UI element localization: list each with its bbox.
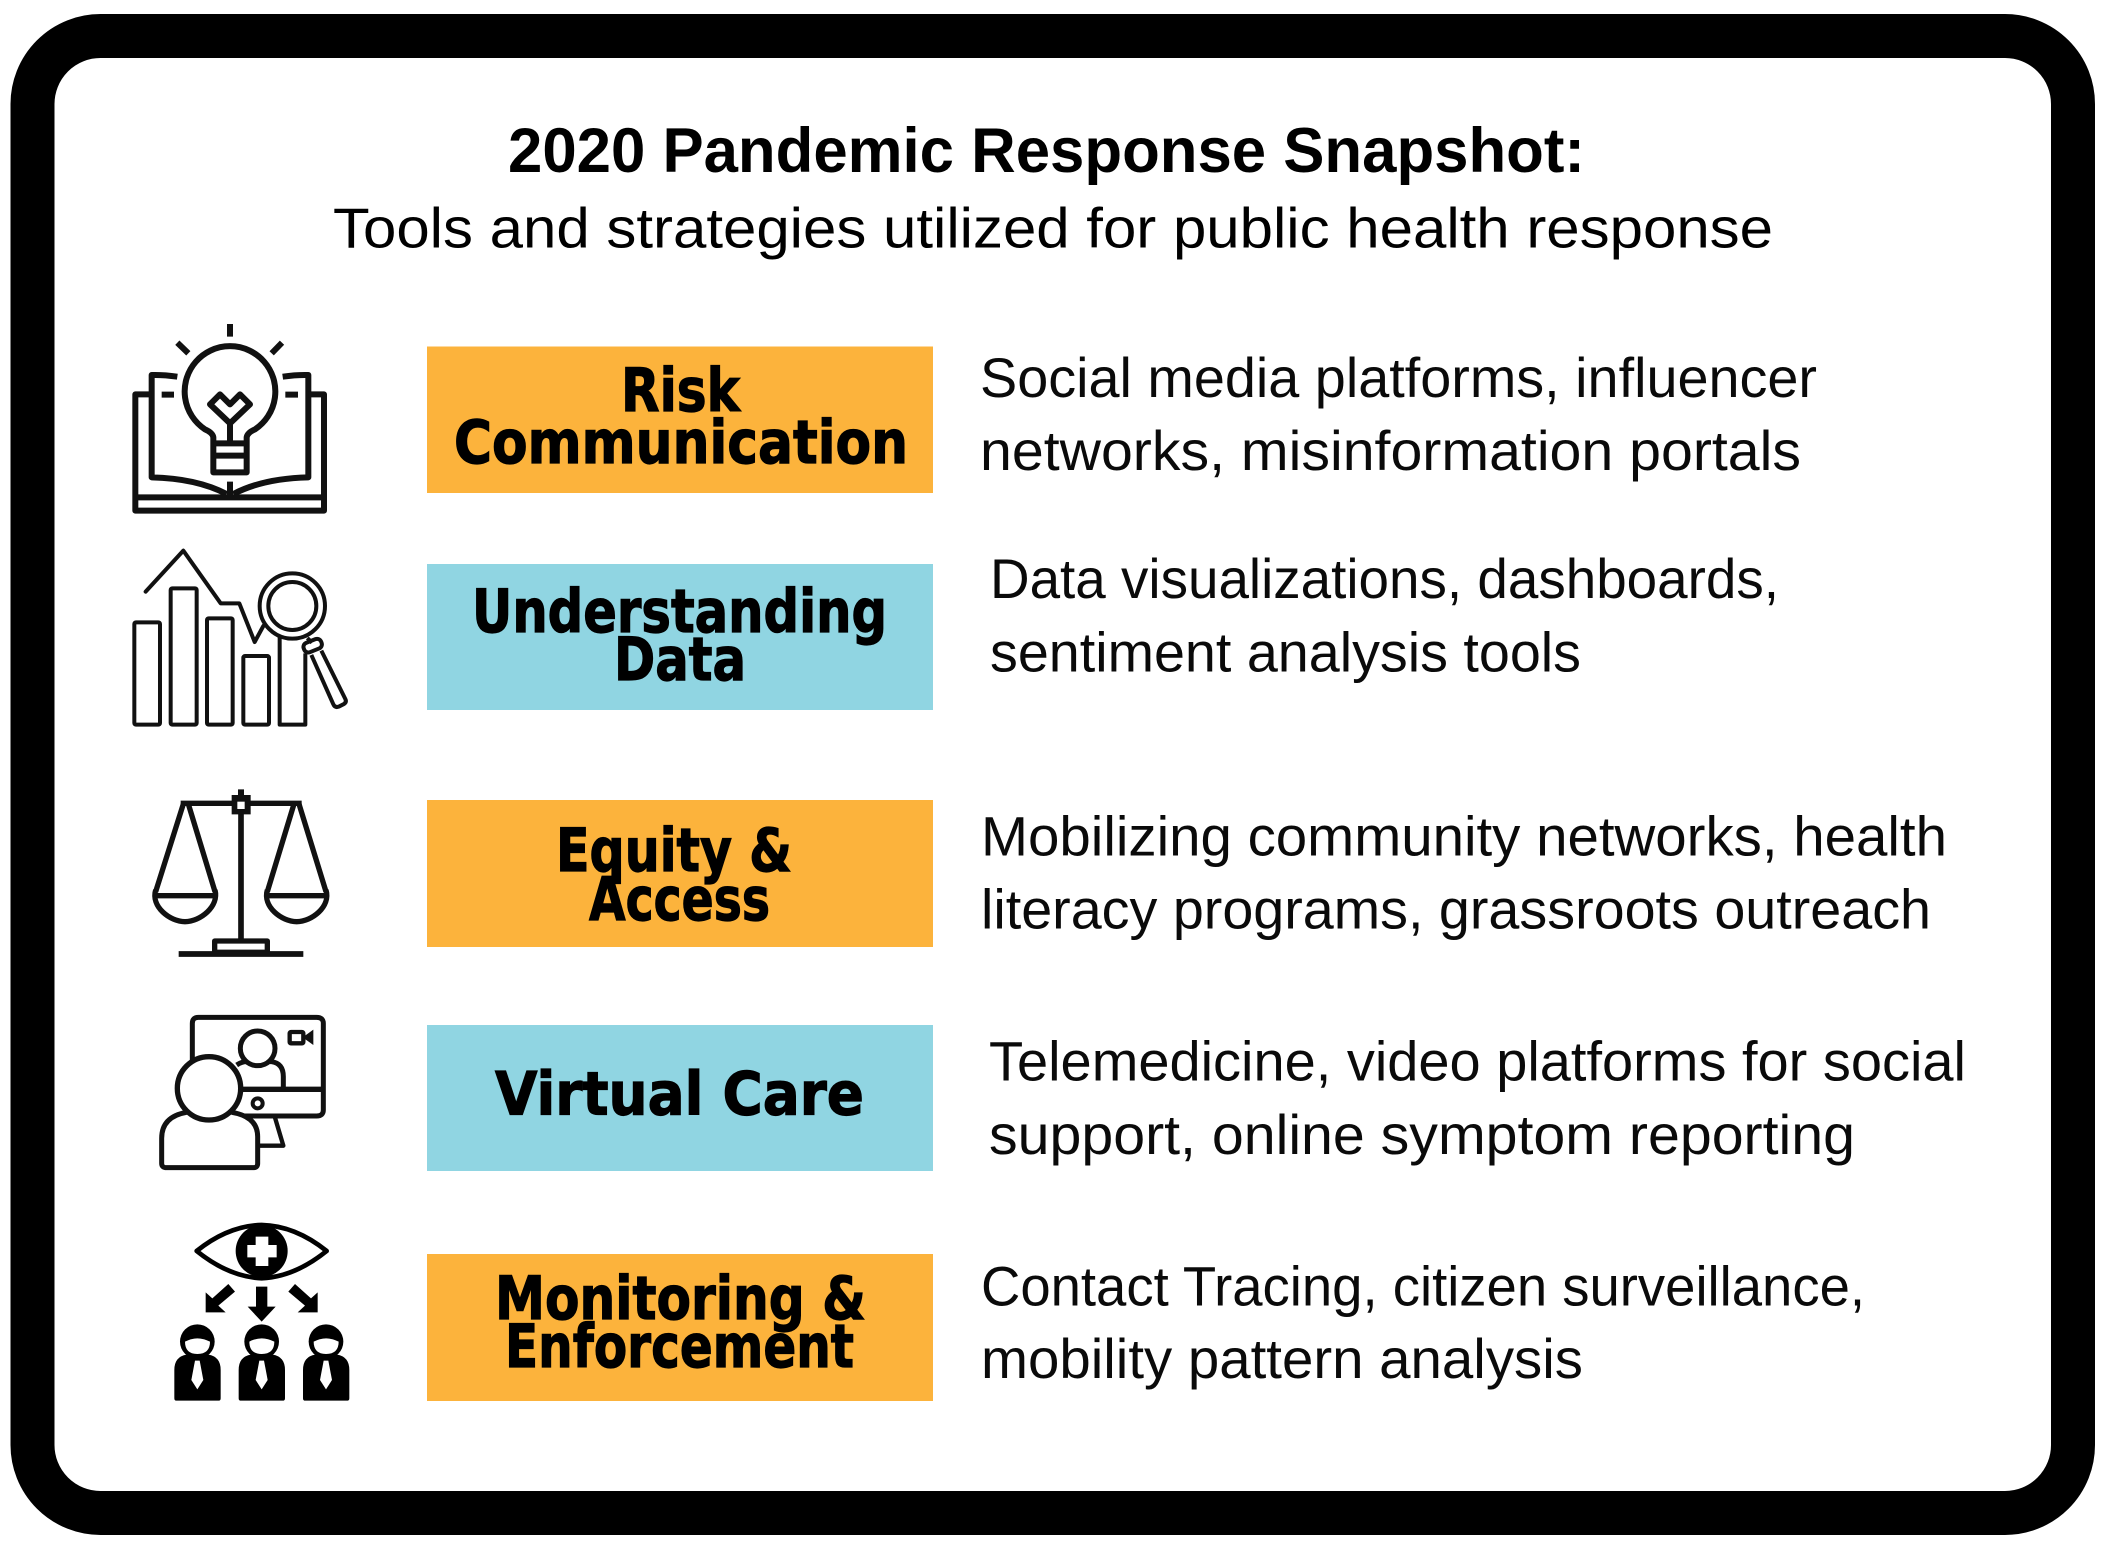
icon: open book with light bulb [135, 324, 324, 511]
label box: understanding data [427, 564, 933, 710]
label box: monitoring and enforcement: Enforcement [505, 1312, 854, 1382]
icon: bar chart with magnifying glass [134, 551, 346, 725]
label box: risk communication: Risk [621, 356, 742, 426]
label box: equity and access [427, 800, 933, 947]
description: understanding data: Data visualizations, dashboards, [990, 547, 1779, 610]
icon: balance scale [155, 789, 327, 954]
description: virtual care [989, 1030, 1966, 1166]
description: virtual care: support, online symptom reporting [989, 1103, 1855, 1166]
description: monitoring and enforcement: Contact Tracing, citizen surveillance, [981, 1254, 1865, 1318]
description: virtual care: Telemedicine, video platforms for social [989, 1030, 1966, 1092]
icon: person on video call [162, 1017, 323, 1168]
description: risk communication: Social media platforms, influencer [980, 346, 1817, 409]
title: 2020 Pandemic Response Snapshot: [508, 116, 1585, 186]
subtitle: Tools and strategies utilized for public health response [333, 196, 1773, 260]
label box: virtual care: Virtual Care [495, 1060, 864, 1130]
description: risk communication [980, 346, 1817, 482]
description: monitoring and enforcement [981, 1254, 1865, 1390]
label box: equity and access: Equity & [556, 816, 792, 886]
label box: risk communication [427, 346, 933, 493]
description: monitoring and enforcement: mobility pattern analysis [981, 1327, 1583, 1390]
description: equity and access: literacy programs, grassroots outreach [981, 878, 1931, 940]
label box: risk communication: Communication [454, 408, 908, 478]
panel: monitoring and enforcement row [174, 1225, 1865, 1401]
description: risk communication: networks, misinformation portals [980, 419, 1801, 482]
description: equity and access [981, 804, 1947, 940]
title block [333, 116, 1773, 260]
description: understanding data: sentiment analysis tools [990, 620, 1581, 684]
label box: equity and access: Access [589, 865, 770, 935]
panel: risk communication row [135, 324, 1817, 511]
label box: understanding data: Understanding [472, 577, 887, 647]
label box: monitoring and enforcement [427, 1254, 933, 1401]
label box: virtual care [427, 1025, 933, 1171]
description: equity and access: Mobilizing community networks, health [981, 804, 1947, 868]
panel: understanding data row [134, 547, 1779, 725]
panel: equity and access row [155, 789, 1947, 954]
icon: eye watching three people [174, 1225, 349, 1401]
label box: understanding data: Data [614, 625, 746, 695]
description: understanding data [990, 547, 1779, 684]
panel: virtual care row [162, 1017, 1966, 1171]
label box: monitoring and enforcement: Monitoring & [495, 1264, 866, 1334]
